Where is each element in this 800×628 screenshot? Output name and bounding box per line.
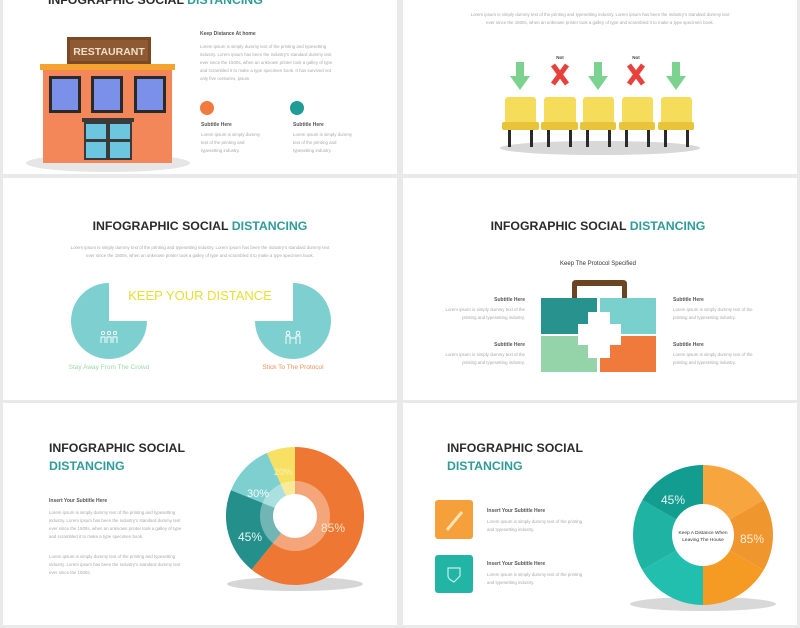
text block: right top: printing and typesetting industry. xyxy=(673,315,736,320)
text block: subtitle 1 xyxy=(201,122,261,153)
text block: intro: Lorem ipsum is simply dummy text of the printing and typesetting industry. Lorem ipsum has been the industry's standard dummy text xyxy=(71,245,330,250)
text block: keep distance xyxy=(200,31,333,81)
text block: intro: ever since the 1500s, when an unknown printer took a galley of type and scrambled it to make a type specimen book. xyxy=(486,20,714,25)
panel: pie chart slide xyxy=(3,403,397,625)
text block: right bottom: Subtitle Here xyxy=(673,342,704,348)
text block: keep distance: Keep Distance At home xyxy=(200,31,256,37)
text block: right top: Lorem ipsum is simply dummy text of the xyxy=(673,307,753,312)
text block: right top xyxy=(673,297,753,320)
chart: donut: 45% xyxy=(238,530,262,544)
text block: subtitle 1: Subtitle Here xyxy=(201,122,232,128)
text block: industry. Lorem ipsum has been the industry's standard dummy text xyxy=(49,562,181,567)
text block: subtitle 2: Lorem ipsum is simply dummy xyxy=(293,132,353,137)
panel: donut slide xyxy=(403,403,797,625)
title: INFOGRAPHIC SOCIAL xyxy=(447,441,583,455)
text block: intro xyxy=(71,245,330,258)
text block: right top: Subtitle Here xyxy=(673,297,704,303)
title: INFOGRAPHIC SOCIAL DISTANCING xyxy=(93,219,307,233)
icons: arrows and crosses: Not xyxy=(632,55,640,60)
text block: left top: Subtitle Here xyxy=(494,297,525,303)
text block: left top: printing and typesetting industry. xyxy=(462,315,525,320)
text block: intro: Lorem ipsum is simply dummy text of the printing and typesetting industry. Lorem ipsum has been the industry's standard dummy text xyxy=(471,12,730,17)
illustration: first aid kit xyxy=(541,280,656,372)
text block: subtitle 2: text of the printing and xyxy=(293,140,337,145)
chart: donut: 20% xyxy=(274,467,292,477)
text block: subtitle 1: Lorem ipsum is simply dummy xyxy=(201,132,261,137)
chart: donut: 45% xyxy=(661,493,685,507)
text block: keep distance: and scrambled it to make a type specimen book. It has survived not xyxy=(200,68,332,73)
icons: arrows and crosses: Not xyxy=(556,55,564,60)
text block: intro: ever since the 1500s, when an unknown printer took a galley of type and scrambled it to make a type specimen book. xyxy=(86,253,314,258)
text block: subtitle 2 xyxy=(487,561,583,585)
chart: donut: 85% xyxy=(740,532,764,546)
title: DISTANCING xyxy=(447,459,523,473)
chart: donut: Leaving The House xyxy=(682,537,724,543)
text block: right bottom: Lorem ipsum is simply dummy text of the xyxy=(673,352,753,357)
chart: donut: 85% xyxy=(321,521,345,535)
text block: keep distance: Lorem ipsum is simply dummy text of the printing and typesetting xyxy=(200,44,327,49)
text block: subtitle 1: text of the printing and xyxy=(201,140,245,145)
text block: intro xyxy=(471,12,730,25)
text block: Lorem ipsum is simply dummy text of the printing and typesetting xyxy=(49,554,176,559)
text block: subtitle 1: Insert Your Subtitle Here xyxy=(487,508,545,514)
label: stick to protocol: Stick To The Protocol xyxy=(262,364,324,371)
text block: subtitle 1 xyxy=(487,508,583,532)
text block: ever since the 1500s. xyxy=(49,570,91,575)
chart: right pie xyxy=(255,283,331,359)
title xyxy=(447,441,583,473)
panel: protocol slide xyxy=(403,178,797,400)
title: INFOGRAPHIC SOCIAL xyxy=(49,441,185,455)
title: INFOGRAPHIC SOCIAL DISTANCING xyxy=(491,219,705,233)
text block xyxy=(49,498,182,575)
text block: keep distance: industry. Lorem ipsum has been the industry's standard dummy text xyxy=(200,52,332,57)
text block: subtitle 1: typesetting industry. xyxy=(201,148,240,153)
heading: keep your distance: KEEP YOUR DISTANCE xyxy=(128,288,272,303)
heading: Keep The Protocol Specified xyxy=(560,261,636,267)
text block: Insert Your Subtitle Here xyxy=(49,498,107,504)
icons: arrows and crosses xyxy=(510,55,686,90)
icon: orange square xyxy=(435,500,473,539)
text block: keep distance: ever since the 1500s, when an unknown printer took a galley of type xyxy=(200,60,333,65)
text block: left bottom: printing and typesetting industry. xyxy=(462,360,525,365)
panel: keep your distance slide xyxy=(3,178,397,400)
chart: donut xyxy=(630,465,776,611)
chart: donut: Keep A Distance When xyxy=(678,530,728,536)
panel: restaurant slide xyxy=(3,0,397,174)
chart: donut xyxy=(226,447,364,591)
label: stay away: Stay Away From The Crowd xyxy=(69,364,150,371)
text block: Lorem ipsum is simply dummy text of the printing and typesetting xyxy=(49,510,176,515)
text block: left bottom xyxy=(445,342,526,365)
text block: subtitle 1: and typesetting industry. xyxy=(487,527,534,532)
title: DISTANCING xyxy=(49,459,125,473)
text block: and scrambled it to make a type specimen book. xyxy=(49,534,143,539)
text block: right bottom xyxy=(673,342,753,365)
text block: subtitle 2: typesetting industry. xyxy=(293,148,332,153)
icon: orange circle xyxy=(200,101,214,115)
panel: chairs slide xyxy=(403,0,797,174)
text block: keep distance: only five centuries, ipsum. xyxy=(200,76,251,81)
text block: left bottom: Subtitle Here xyxy=(494,342,525,348)
icon: teal circle xyxy=(290,101,304,115)
text block: left top: Lorem ipsum is simply dummy text of the xyxy=(445,307,526,312)
text block: subtitle 2: Insert Your Subtitle Here xyxy=(487,561,545,567)
illustration: restaurant: RESTAURANT xyxy=(73,46,145,58)
text block: ever since the 1500s, when an unknown printer took a galley of type xyxy=(49,526,182,531)
text block: subtitle 2 xyxy=(293,122,353,153)
text block: left bottom: Lorem ipsum is simply dummy text of the xyxy=(445,352,526,357)
text block: industry. Lorem ipsum has been the industry's standard dummy text xyxy=(49,518,181,523)
text block: subtitle 2: Subtitle Here xyxy=(293,122,324,128)
chart: left pie xyxy=(71,283,147,359)
text block: right bottom: printing and typesetting industry. xyxy=(673,360,736,365)
text block: subtitle 2: Lorem ipsum is simply dummy text of the printing xyxy=(487,572,583,577)
illustration: restaurant xyxy=(26,37,190,172)
illustration: chairs xyxy=(500,97,700,155)
text block: subtitle 1: Lorem ipsum is simply dummy text of the printing xyxy=(487,519,583,524)
text block: subtitle 2: and typesetting industry. xyxy=(487,580,534,585)
icon: teal square xyxy=(435,555,473,593)
chart: donut: 30% xyxy=(247,488,269,500)
text block: left top xyxy=(445,297,526,320)
title xyxy=(49,441,185,473)
